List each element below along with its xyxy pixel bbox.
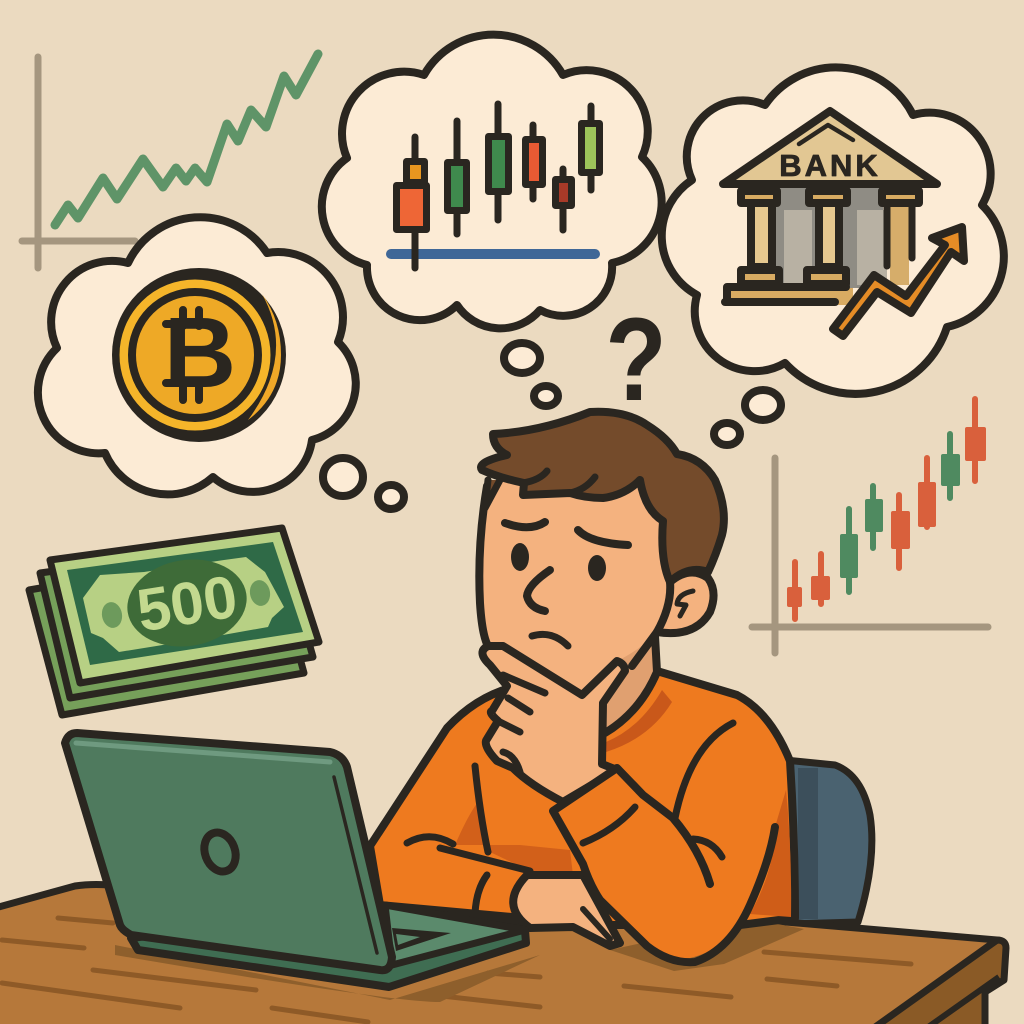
laptop — [65, 733, 526, 987]
bubble outline — [662, 67, 1004, 394]
bank label: BANK — [779, 148, 881, 183]
blue baseline — [391, 249, 595, 259]
person — [370, 412, 795, 962]
nose — [527, 570, 550, 611]
hand on chin — [482, 646, 625, 802]
hand on desk — [513, 875, 620, 946]
sweater shading — [750, 790, 791, 917]
mouth — [532, 634, 568, 646]
sleeve creases — [583, 723, 733, 857]
person shadow on desk — [610, 919, 804, 971]
neck — [603, 632, 657, 733]
desk top — [0, 884, 997, 1024]
thought bubble: candlesticks — [322, 35, 662, 406]
bubble outline — [38, 217, 356, 494]
candlestick chart: right background — [752, 399, 988, 653]
chair — [785, 760, 872, 924]
icon: bitcoin coin: B — [164, 297, 236, 409]
wood grain — [2, 918, 911, 1022]
thought bubble: bank — [662, 67, 1004, 445]
face outline — [479, 486, 657, 666]
eyes — [511, 543, 529, 571]
icon: orange rising arrow — [833, 227, 964, 336]
left forearm and cuff — [383, 766, 530, 925]
desk — [0, 884, 1006, 1024]
icon: bank building — [723, 111, 964, 336]
keyboard — [392, 928, 451, 951]
icon: laptop logo — [199, 828, 241, 876]
lid edge line — [334, 777, 377, 953]
stack of 500 banknotes — [29, 528, 319, 715]
face fill — [480, 470, 670, 695]
line chart: rising green line — [22, 54, 318, 268]
laptop lid — [65, 733, 392, 970]
collar shade — [606, 690, 672, 752]
bubble outline — [322, 35, 662, 328]
right forearm — [553, 768, 745, 958]
bubble trail dots — [323, 458, 404, 509]
laptop base — [131, 907, 526, 987]
bubble trail dots — [504, 343, 558, 406]
candlestick icons — [396, 104, 600, 268]
lid highlight — [76, 743, 330, 762]
laptop shadow on desk — [115, 945, 540, 1002]
icon: bitcoin coin — [112, 268, 286, 442]
eyebrows — [505, 522, 628, 545]
ear — [657, 572, 714, 633]
question mark: ? — [605, 294, 667, 426]
thought bubble: bitcoin — [38, 217, 404, 509]
banknote value: 500 — [132, 563, 242, 644]
torso in orange sweater — [370, 671, 795, 925]
desk side band and leg — [860, 940, 1006, 1024]
bubble trail dots — [714, 390, 781, 445]
hair — [481, 412, 724, 582]
